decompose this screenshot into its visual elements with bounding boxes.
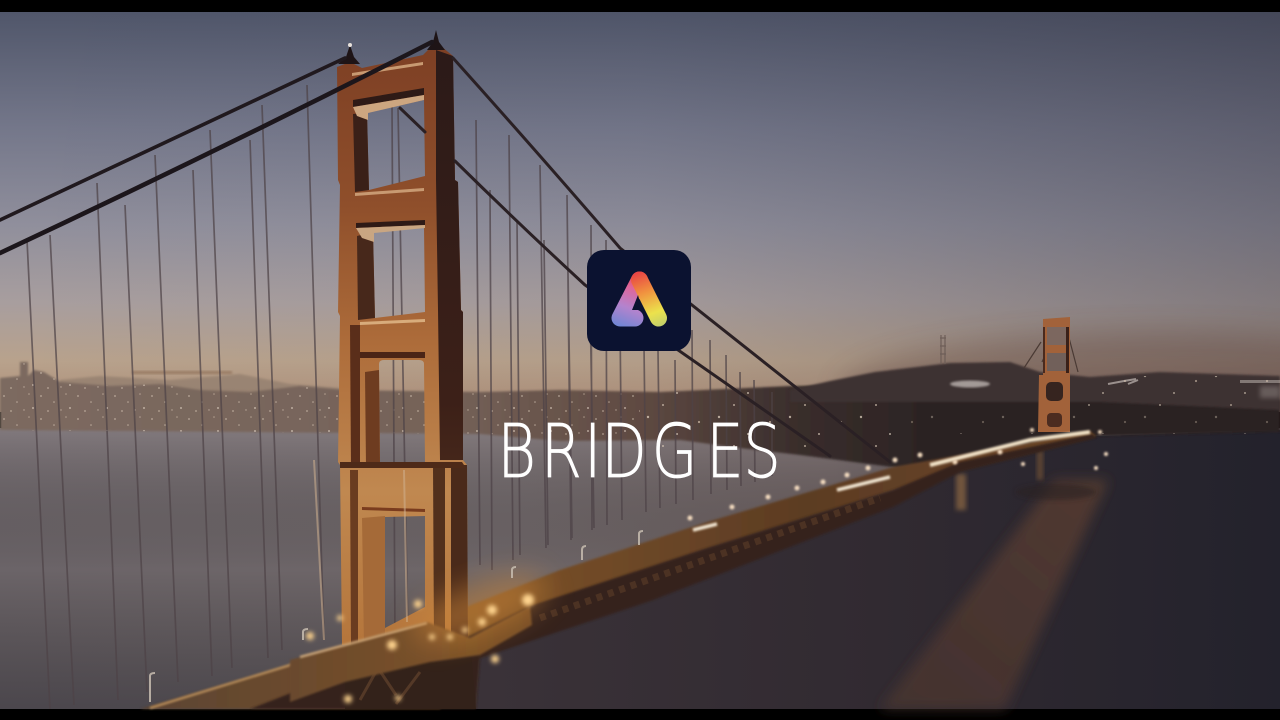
app icon: adobe express <box>587 250 691 351</box>
tower body with windows <box>337 42 468 645</box>
logo letter A <box>620 280 658 318</box>
hanger cables behind tower <box>27 85 772 709</box>
main bridge tower <box>337 30 476 709</box>
foreground hangers over tower <box>314 460 407 640</box>
photo: evening sky <box>0 12 1280 452</box>
photo: bay water <box>0 428 1280 709</box>
tower caps <box>338 30 445 64</box>
bridge lights <box>150 428 1108 703</box>
tower dark faces <box>350 50 468 645</box>
tower strut bands <box>340 62 466 512</box>
suspension cables <box>0 42 890 462</box>
icon: radio tower on hill <box>940 335 946 364</box>
far tower of bridge <box>1024 317 1078 432</box>
bridge deck <box>140 431 1096 709</box>
tower base shadow <box>345 640 476 709</box>
photo: san francisco skyline and headlands <box>0 362 1280 468</box>
heading: BRIDGES: BRIDGES <box>497 409 781 495</box>
photo: marin hills <box>790 362 1280 434</box>
deck section in front of tower <box>290 606 532 702</box>
